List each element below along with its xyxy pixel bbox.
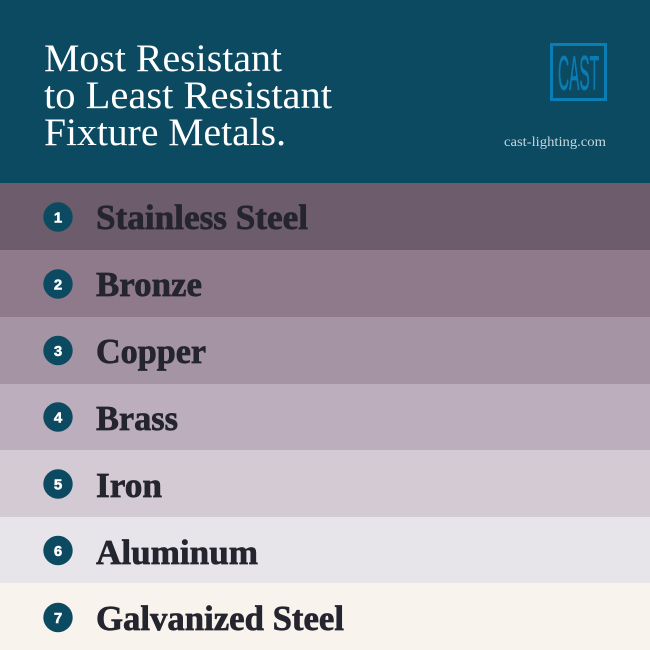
icon: number 7: 7 xyxy=(54,610,62,627)
icon: CAST logo xyxy=(552,44,606,100)
icon: number 4: 4 xyxy=(54,410,63,426)
icon: number 3 xyxy=(43,336,73,365)
panel: header xyxy=(0,0,650,183)
label: Bronze xyxy=(96,266,202,304)
icon: number 2 xyxy=(43,269,73,299)
panel: rank 4 Brass xyxy=(0,384,650,450)
title: to Least Resistant xyxy=(44,74,332,117)
icon: number 6: 6 xyxy=(54,543,62,560)
title: Most Resistant xyxy=(44,37,282,80)
icon: number 3: 3 xyxy=(54,343,62,360)
panel: rank 1 Stainless Steel xyxy=(0,183,650,250)
icon: number 2: 2 xyxy=(54,276,62,294)
label: Galvanized Steel xyxy=(96,600,344,638)
website url: cast-lighting.com xyxy=(504,135,606,150)
label: Brass xyxy=(96,400,178,438)
icon: number 7 xyxy=(43,603,73,632)
icon: number 5: 5 xyxy=(54,476,62,494)
icon: number 1 xyxy=(43,202,73,232)
panel: rank 2 Bronze xyxy=(0,250,650,317)
icon: number 6 xyxy=(43,536,73,565)
panel: rank 5 Iron xyxy=(0,450,650,517)
title xyxy=(44,37,332,154)
icon: number 1: 1 xyxy=(54,210,62,226)
label: Copper xyxy=(96,333,206,371)
title: Fixture Metals. xyxy=(44,111,286,154)
icon: number 5 xyxy=(43,469,73,499)
panel: rank 7 Galvanized Steel xyxy=(0,583,650,650)
label: Iron xyxy=(96,467,162,505)
label: Aluminum xyxy=(96,534,258,572)
icon: number 4 xyxy=(43,402,73,432)
label: Stainless Steel xyxy=(96,199,308,237)
panel: rank 3 Copper xyxy=(0,317,650,384)
panel: rank 6 Aluminum xyxy=(0,517,650,583)
